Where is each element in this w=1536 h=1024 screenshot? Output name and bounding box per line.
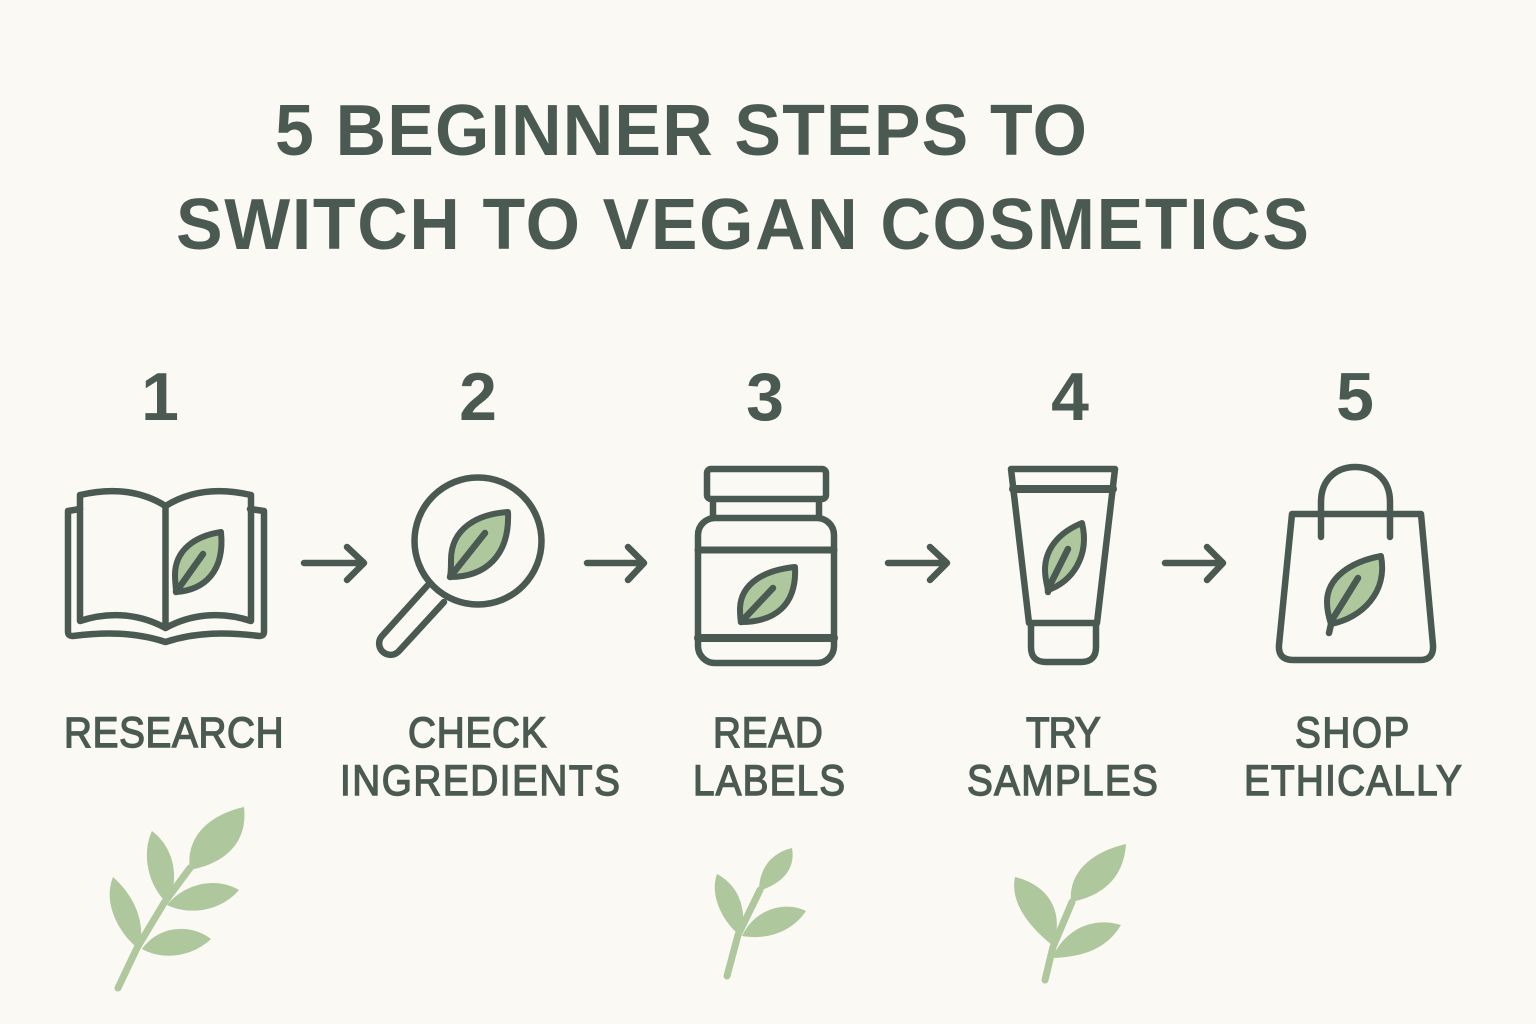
decorative sprig left xyxy=(110,807,244,988)
step label: check ingredients: CHECK xyxy=(408,708,547,756)
step number 5: 5 xyxy=(1336,359,1374,435)
icon: magnifying glass with leaf xyxy=(379,478,542,655)
icon: tube with leaf xyxy=(1011,469,1115,662)
icon: cosmetic jar with leaf xyxy=(698,469,834,663)
step label: try samples: SAMPLES xyxy=(967,756,1158,804)
step label: shop ethically: ETHICALLY xyxy=(1244,756,1462,804)
step 2: check ingredients xyxy=(340,359,620,804)
step label: check ingredients xyxy=(340,708,620,804)
arrow 2 to 3 xyxy=(587,547,644,580)
icon: shopping bag with leaf xyxy=(1279,467,1433,660)
step label: read labels: LABELS xyxy=(693,756,845,804)
decorative sprig right xyxy=(1014,844,1126,980)
step number 3: 3 xyxy=(746,359,784,435)
step 4: try samples xyxy=(967,359,1158,804)
decorative sprig centre xyxy=(715,848,806,976)
step label: shop ethically xyxy=(1244,708,1462,804)
title: SWITCH TO VEGAN COSMETICS xyxy=(176,185,1309,265)
step 3: read labels xyxy=(693,359,845,804)
step label: try samples: TRY xyxy=(1026,708,1101,756)
arrow 1 to 2 xyxy=(304,547,364,580)
step label: read labels xyxy=(693,708,845,804)
arrow 4 to 5 xyxy=(1165,547,1223,580)
title xyxy=(176,91,1309,265)
step 5: shop ethically xyxy=(1244,359,1462,804)
step label: research: RESEARCH xyxy=(64,708,284,756)
step label: try samples xyxy=(967,708,1158,804)
icon: open book with leaf xyxy=(68,491,264,642)
arrow 3 to 4 xyxy=(888,547,947,580)
title: 5 BEGINNER STEPS TO xyxy=(275,91,1087,171)
step number 1: 1 xyxy=(141,359,179,435)
step label: check ingredients: INGREDIENTS xyxy=(340,756,620,804)
step label: read labels: READ xyxy=(713,708,823,756)
step label: shop ethically: SHOP xyxy=(1295,708,1409,756)
step number 4: 4 xyxy=(1051,359,1089,435)
step number 2: 2 xyxy=(459,359,497,435)
step 1: research xyxy=(64,359,284,756)
